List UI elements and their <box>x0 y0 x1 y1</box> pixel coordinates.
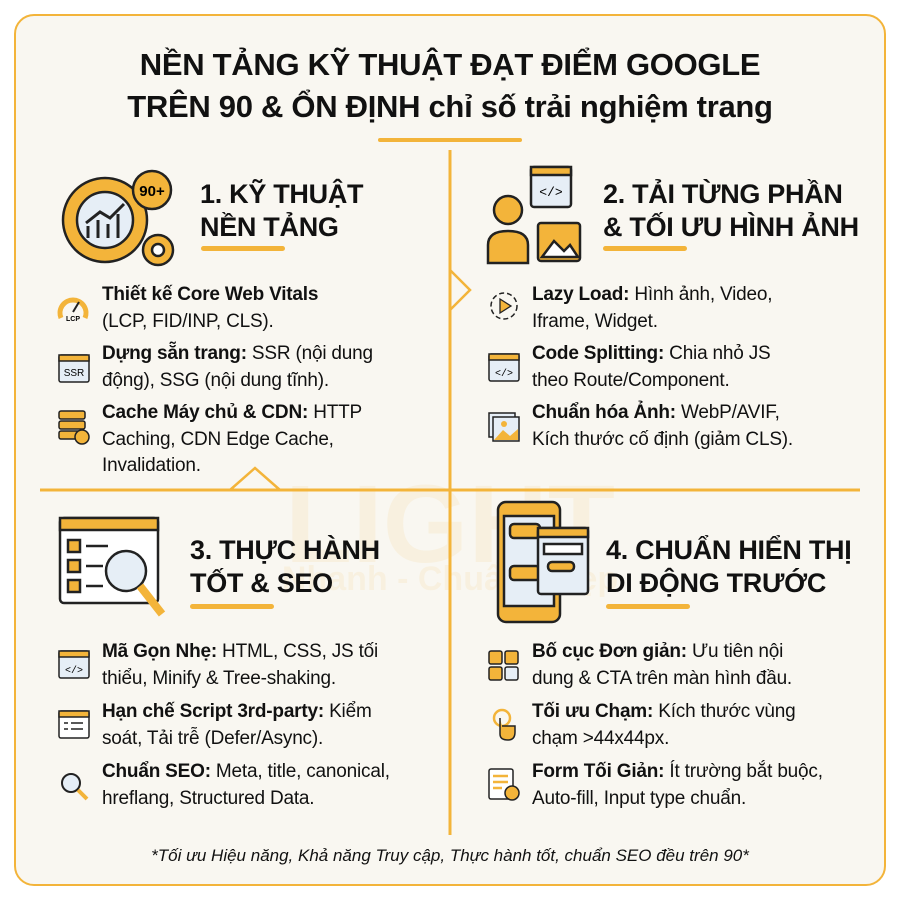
item: lazy load: Iframe, Widget. <box>532 310 658 332</box>
icon: mobile <box>496 500 590 624</box>
text: Nhanh - Chuẩn - Đẹp <box>282 560 618 598</box>
panel: 1: SSR <box>64 368 84 379</box>
item: seo <box>102 761 390 808</box>
item: layout: dung & CTA trên màn hình đầu. <box>532 668 792 688</box>
heading: TỐT & SEO <box>190 568 333 598</box>
item: scripts: soát, Tải trễ (Defer/Async). <box>102 728 323 748</box>
heading: NỀN TẢNG <box>200 212 339 242</box>
item: lazy load <box>532 284 772 332</box>
icon: gear chart: 90+ <box>139 183 165 200</box>
item: cache: Invalidation. <box>102 455 201 476</box>
item: layout: Bố cục Đơn giản: Ưu tiên nội <box>532 641 783 662</box>
item: scripts: Hạn chế Script 3rd-party: Kiểm <box>102 701 372 722</box>
icon: checklist magnifier <box>58 516 166 616</box>
item: cache: Caching, CDN Edge Cache, <box>102 428 334 450</box>
title <box>127 47 773 124</box>
item: cache <box>102 402 362 476</box>
watermark: LIGHT <box>285 463 615 586</box>
icon: gear chart <box>62 170 174 266</box>
item: lazy load: Lazy Load: Hình ảnh, Video, <box>532 284 772 305</box>
icon: person with code <box>486 166 582 264</box>
item: code splitting <box>532 343 770 390</box>
item: code splitting: Code Splitting: Chia nhỏ JS <box>532 343 770 364</box>
item: core web vitals: (LCP, FID/INP, CLS). <box>102 310 274 332</box>
item: ssr <box>102 342 373 390</box>
heading: DI ĐỘNG TRƯỚC <box>606 568 826 598</box>
item: scripts <box>102 701 372 748</box>
item: code <box>102 641 378 688</box>
heading <box>606 535 851 598</box>
panel: 3: </> <box>65 665 83 677</box>
panel: 4 <box>488 500 851 808</box>
item: touch <box>532 701 796 748</box>
panel: 1: LCP <box>66 316 80 323</box>
item: image: Kích thước cố định (giảm CLS). <box>532 428 793 450</box>
panel: 3 <box>58 516 390 808</box>
heading: 3. THỰC HÀNH <box>190 535 380 565</box>
item: seo: Chuẩn SEO: Meta, title, canonical, <box>102 761 390 782</box>
item: image: Chuẩn hóa Ảnh: WebP/AVIF, <box>532 402 780 423</box>
item: touch: chạm >44x44px. <box>532 728 669 748</box>
title: NỀN TẢNG KỸ THUẬT ĐẠT ĐIỂM GOOGLE <box>140 47 760 82</box>
item: core web vitals <box>102 284 318 332</box>
heading: 4. CHUẨN HIỂN THỊ <box>606 535 851 565</box>
item: code: Mã Gọn Nhẹ: HTML, CSS, JS tối <box>102 641 378 662</box>
item: code: thiểu, Minify & Tree-shaking. <box>102 668 336 688</box>
panel: 1 <box>58 170 373 476</box>
heading: 1. KỸ THUẬT <box>200 179 363 209</box>
footer note: *Tối ưu Hiệu năng, Khả năng Truy cập, Thực hành tốt, chuẩn SEO đều trên 90* <box>151 846 749 865</box>
item: ssr: động), SSG (nội dung tĩnh). <box>102 370 329 390</box>
heading: 2. TẢI TỪNG PHẦN <box>603 179 843 209</box>
item: seo: hreflang, Structured Data. <box>102 788 314 808</box>
item: core web vitals: Thiết kế Core Web Vitals <box>102 284 318 305</box>
item: code splitting: theo Route/Component. <box>532 370 730 390</box>
item: image <box>532 400 793 450</box>
item: form: Form Tối Giản: Ít trường bắt buộc, <box>532 761 823 782</box>
heading: & TỐI ƯU HÌNH ẢNH <box>603 212 859 242</box>
title: TRÊN 90 & ỔN ĐỊNH chỉ số trải nghiệm trang <box>127 89 773 124</box>
item: ssr: Dựng sẵn trang: SSR (nội dung <box>102 343 373 364</box>
item: layout <box>532 641 792 688</box>
item: form <box>532 760 823 808</box>
heading <box>200 178 364 242</box>
item: touch: Tối ưu Chạm: Kích thước vùng <box>532 701 796 722</box>
panel: 2 <box>486 166 859 450</box>
item: form: Auto-fill, Input type chuẩn. <box>532 788 746 808</box>
icon: person with code: </> <box>539 185 563 200</box>
heading <box>603 179 859 242</box>
heading <box>190 535 380 598</box>
item: cache: Cache Máy chủ & CDN: HTTP <box>102 402 362 423</box>
panel: 2: </> <box>495 368 513 380</box>
